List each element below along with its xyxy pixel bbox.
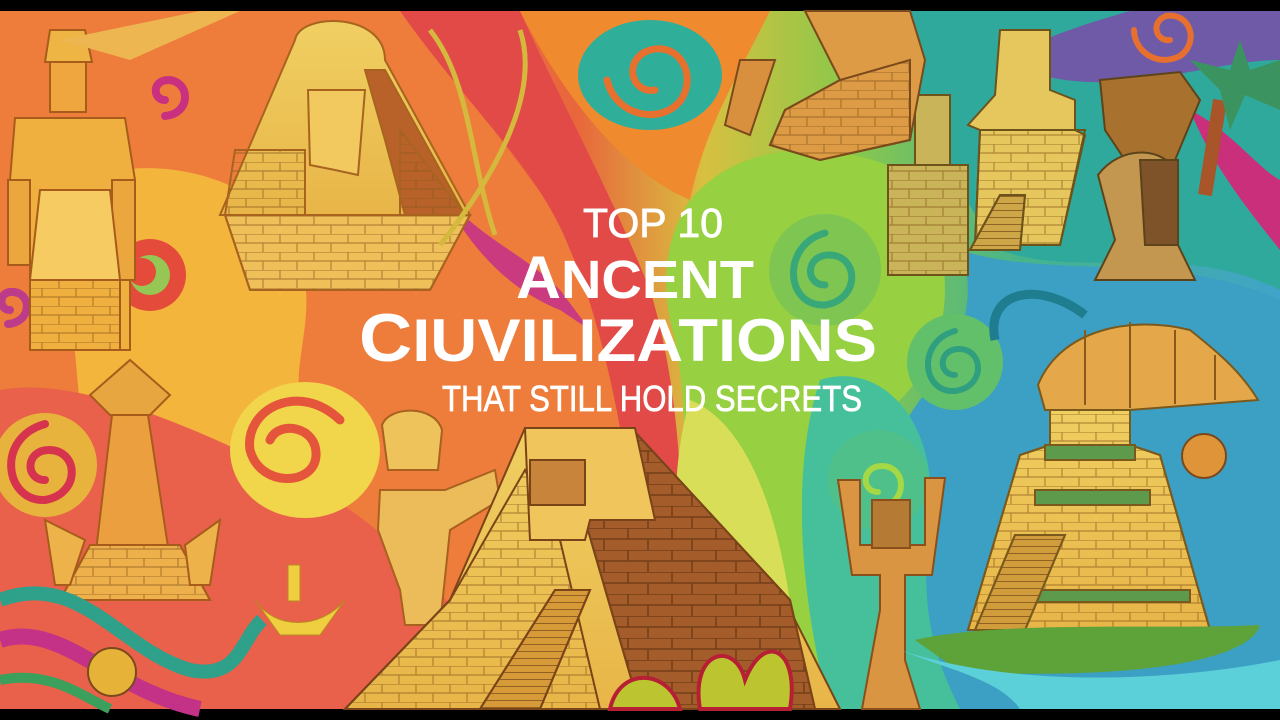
temple: mid tower [888, 95, 968, 275]
spiral: left side [1, 292, 27, 324]
vines [430, 30, 525, 245]
lotus [255, 565, 345, 635]
pyramid: right [968, 322, 1258, 630]
spiral: left yellow [230, 382, 380, 518]
totem [838, 478, 945, 709]
orb [1182, 434, 1226, 478]
tentacle [994, 294, 1085, 340]
figure: standing king [8, 30, 135, 350]
sphinx: upper [220, 21, 470, 290]
spiral: top centre [578, 20, 722, 130]
palm [1190, 40, 1280, 195]
bottom-left swirls [0, 593, 262, 709]
spiral: left magenta [156, 80, 185, 116]
spiral: far left [0, 413, 97, 517]
title line: ancient: ANCENT [516, 244, 754, 311]
title line: civilizations: CIUVILIZATIONS [359, 300, 877, 376]
title line: top 10: TOP 10 [583, 200, 723, 246]
sword [60, 11, 240, 60]
spiral: green lower [907, 314, 1003, 410]
head statue [1095, 72, 1200, 280]
temple: stepped tower [968, 30, 1085, 250]
ruins: top [725, 11, 925, 160]
spiral: top right [1134, 16, 1191, 60]
title [359, 200, 877, 419]
pyramid: foreground [345, 428, 840, 709]
figure: priest [378, 411, 500, 625]
spiral: teal lower [828, 430, 928, 530]
bush: bottom [610, 652, 792, 709]
island and waves [900, 625, 1280, 709]
figure: seated statue [45, 360, 220, 600]
spirals [0, 16, 1191, 530]
subtitle: THAT STILL HOLD SECRETS [442, 378, 862, 419]
spiral: green upper [769, 214, 881, 326]
vortex: red ring [114, 239, 186, 311]
